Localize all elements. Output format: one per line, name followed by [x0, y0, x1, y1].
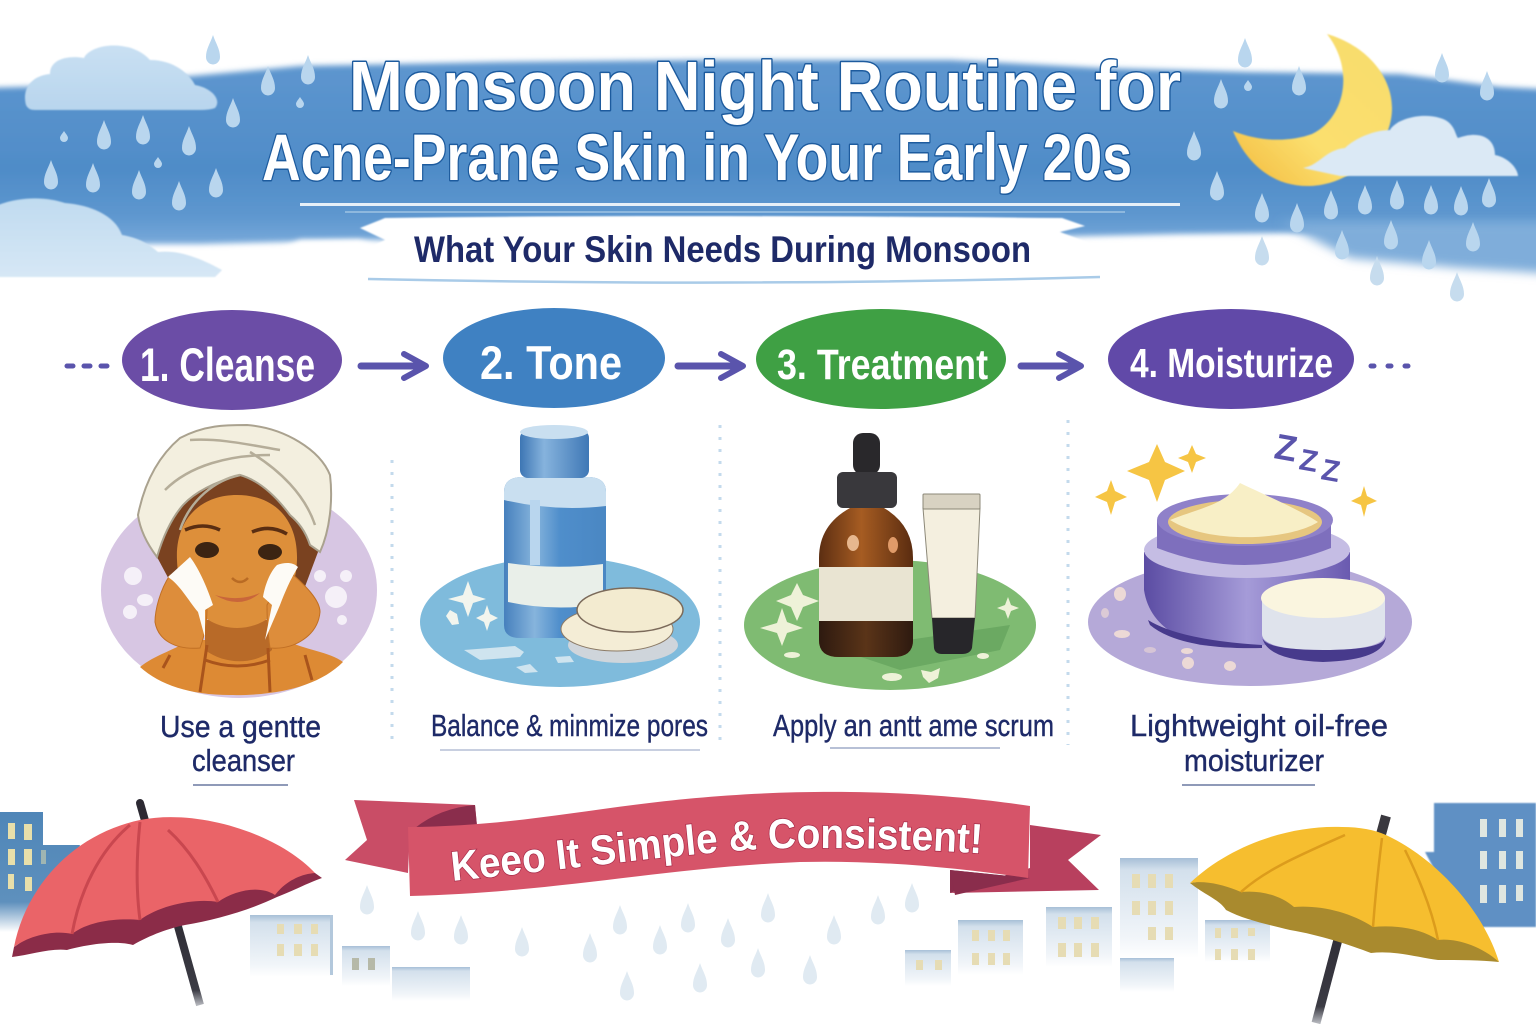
raindrops: header [44, 35, 1496, 302]
banner ribbon: Keeo It Simple & Consistent! [451, 817, 981, 882]
illustration: cleanse [101, 425, 377, 698]
clouds [0, 45, 222, 277]
illustration: moisturizer [1088, 444, 1412, 686]
step 4 pill: 4. Moisturize [1130, 340, 1333, 386]
red umbrella [12, 803, 322, 1005]
title: Acne-Prane Skin in Your Early 20s [262, 120, 1132, 194]
city left [0, 812, 470, 1001]
caption: cleanse [160, 709, 321, 785]
dotted dividers [392, 420, 1068, 745]
title: Monsoon Night Routine for [349, 47, 1181, 125]
city right [905, 803, 1536, 992]
title [262, 47, 1181, 194]
captions [160, 708, 1388, 785]
moon [1233, 34, 1392, 186]
caption: moisturize: Lightweight oil-free [1130, 708, 1388, 743]
illustration: serum [744, 433, 1036, 690]
caption: moisturize: moisturizer [1184, 743, 1324, 778]
banner ribbon [345, 792, 1101, 896]
illustration: toner [420, 425, 700, 687]
step 2 pill: 2. Tone [480, 336, 622, 389]
sleeping zzz [1272, 426, 1343, 489]
sleeping zzz: Z [1297, 443, 1321, 479]
step 3 pill [756, 309, 1006, 409]
caption: tone: Balance & minmize pores [431, 708, 708, 743]
step pills [122, 308, 1354, 410]
sleeping zzz: Z [1272, 426, 1300, 470]
subtitle ribbon: What Your Skin Needs During Monsoon [414, 229, 1031, 270]
step 1 pill: 1. Cleanse [140, 338, 315, 391]
caption: cleanse: cleanser [192, 743, 295, 778]
caption: treatment: Apply an antt ame scrum [773, 708, 1054, 743]
sleeping zzz: Z [1319, 453, 1343, 489]
step 2 pill [443, 308, 665, 408]
bottom raindrops [360, 883, 919, 1000]
step 3 pill: 3. Treatment [777, 341, 988, 389]
caption: moisturize [1130, 708, 1388, 785]
subtitle ribbon [230, 203, 1300, 283]
step 1 pill [122, 310, 342, 410]
arrows [67, 354, 1422, 378]
header band [0, 60, 1536, 274]
caption: cleanse: Use a gentte [160, 709, 321, 744]
step 4 pill [1108, 309, 1354, 409]
yellow umbrella [1190, 816, 1499, 1023]
right cloud [1303, 116, 1518, 176]
